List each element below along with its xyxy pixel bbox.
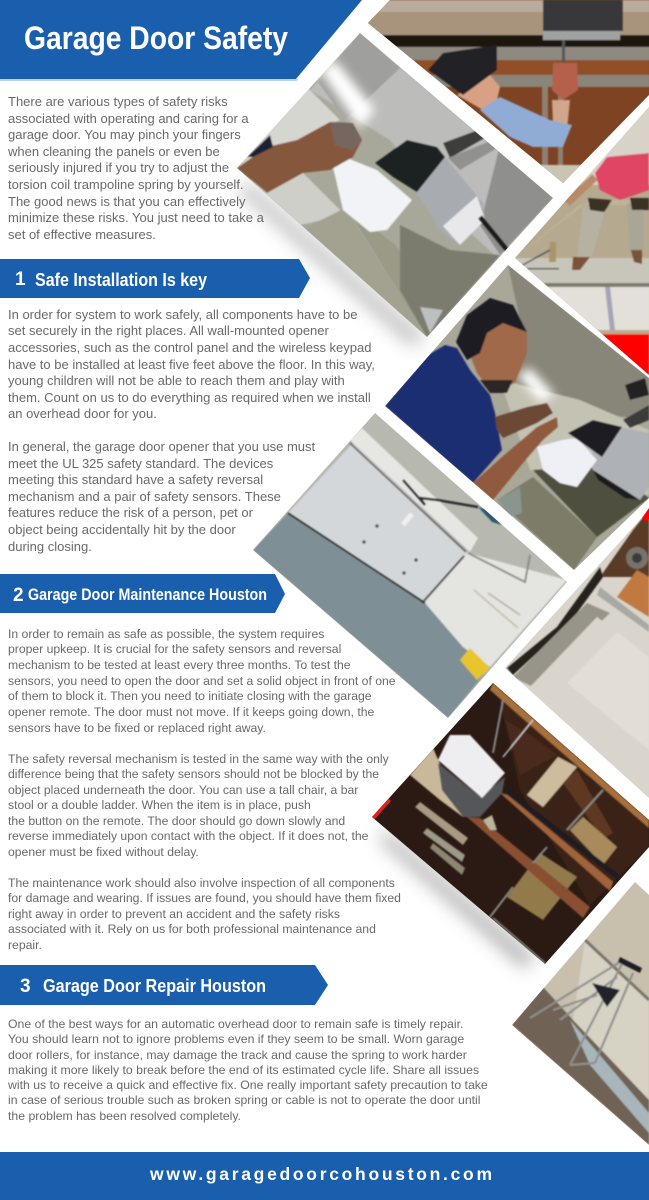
footer banner [0, 1152, 649, 1200]
section 1 text: In general, the garage door opener that you use must [8, 439, 316, 454]
section 2 text: reverse immediately upon contact with the object. If it does not, the [8, 829, 369, 843]
photo: technician in blue shirt [380, 260, 649, 575]
section 3 heading bar [0, 965, 328, 1005]
section 3 text: door rollers, for instance, may damage the track and cause the spring to work harder [8, 1048, 467, 1062]
section 3 text [7, 1017, 488, 1123]
section 2 text: The maintenance work should also involve inspection of all components [8, 876, 395, 890]
section 2 text: mechanism to be tested at least every three months. To test the [8, 658, 351, 672]
section 3 text: One of the best ways for an automatic overhead door to remain safe is timely repair. [8, 1017, 463, 1031]
section 1 text: young children will not be able to reach them and play with [8, 373, 345, 388]
section 1 heading bar: Safe Installation Is key [35, 270, 207, 290]
intro text: associated with operating and caring for a [8, 111, 249, 126]
website url: www.garagedoorcohouston.com [149, 1164, 492, 1184]
section 2 text: proper upkeep. It is crucial for the safety sensors and reversal [8, 642, 341, 656]
photo: step ladder in garage [505, 880, 649, 1150]
title banner [0, 0, 362, 81]
section 2 text: In order to remain as safe as possible, the system requires [8, 627, 324, 641]
section 2 text: right away in order to prevent an accident and the safety risks [8, 907, 340, 921]
photo: garage door section [500, 505, 649, 800]
photo shadows [240, 180, 535, 968]
photo: exposed wood joists with opener [370, 680, 649, 970]
section 2 text: opener must be fixed without delay. [8, 845, 199, 859]
section 1 text: features reduce the risk of a person, pet or [8, 505, 254, 520]
intro text: seriously injured if you try to adjust the [8, 160, 229, 175]
photo: technician with cap under opener [360, 0, 649, 190]
section 3 heading bar: Garage Door Repair Houston [43, 976, 266, 996]
section 1 text: during closing. [8, 539, 92, 554]
intro text: garage door. You may pinch your fingers [8, 127, 241, 142]
section 1 heading bar: 1 [15, 269, 26, 290]
intro text [7, 94, 265, 242]
section 2 text: stool or a double ladder. When the item is in place, push [8, 798, 311, 812]
photo: white door from above [250, 410, 570, 720]
section 2 text: object placed underneath the door. You can use a tall chair, a bar [8, 783, 358, 797]
section 1 text: an overhead door for you. [8, 406, 157, 421]
section 2 text: for damage and wearing. If issues are found, you should have them fixed [8, 891, 401, 905]
photo: worker bending over floor [510, 100, 649, 380]
intro text: when cleaning the panels or even be [7, 144, 220, 159]
section 2 text [8, 627, 401, 952]
section 1 text: set securely in the right places. All wall-mounted opener [8, 323, 330, 338]
section 3 text: making it more likely to break before the end of its estimated cycle life. Share all issues [8, 1063, 479, 1077]
title: Garage Door Safety [24, 20, 288, 56]
intro text: minimize these risks. You just need to take a [8, 210, 265, 225]
section 2 text: sensors have to be fixed or replaced right away. [8, 721, 266, 735]
section 2 text: repair. [8, 938, 42, 952]
intro text: There are various types of safety risks [8, 94, 228, 109]
section 2 text: associated with it. Rely on us for both professional maintenance and [8, 922, 376, 936]
section 2 text: of them to block it. Then you need to initiate closing with the garage [8, 689, 372, 703]
section 2 text: the button on the remote. The door should go down slowly and [8, 814, 345, 828]
section 1 text: them. Count on us to do everything as required when we install [8, 390, 371, 405]
section 2 heading bar [0, 574, 285, 613]
section 1 text: meet the UL 325 safety standard. The devices [8, 456, 274, 471]
section 2 heading bar: 2 [13, 585, 24, 606]
section 3 text: You should learn not to ignore problems even if they seem to be small. Worn garage [8, 1032, 464, 1046]
section 1 text: mechanism and a pair of safety sensors. These [8, 489, 281, 504]
section 2 text: sensors, you need to open the door and set a solid object in front of one [8, 674, 396, 688]
section 1 text: accessories, such as the control panel and the wireless keypad [8, 340, 371, 355]
section 2 text: The safety reversal mechanism is tested in the same way with the only [8, 752, 390, 766]
photo: opener with hand [230, 30, 560, 340]
intro text: torsion coil trampoline spring by yourself. [8, 177, 244, 192]
section 3 text: in case of serious trouble such as broken spring or cable is not to operate the door until [8, 1093, 481, 1107]
section 3 heading bar: 3 [20, 976, 31, 997]
section 3 text: the problem has been resolved completely. [8, 1109, 241, 1123]
section 3 text: with us to receive a quick and effective fix. One really important safety precaution to take [7, 1078, 488, 1092]
section 1 text [8, 307, 375, 554]
red corner accent [642, 508, 649, 522]
intro text: set of effective measures. [8, 227, 156, 242]
section 1 text: have to be installed at least five feet above the floor. In this way, [8, 357, 375, 372]
intro text: The good news is that you can effectively [8, 194, 246, 209]
section 2 text: opener remote. The door must not move. If it keeps going down, the [8, 705, 375, 719]
section 1 text: In order for system to work safely, all components have to be [8, 307, 357, 322]
section 1 heading bar [0, 259, 310, 298]
section 2 text: difference being that the safety sensors should not be blocked by the [8, 767, 379, 781]
section 1 text: object being accidentally hit by the door [8, 522, 236, 537]
section 2 heading bar: Garage Door Maintenance Houston [28, 585, 267, 604]
section 1 text: meeting this standard have a safety reversal [8, 472, 263, 487]
